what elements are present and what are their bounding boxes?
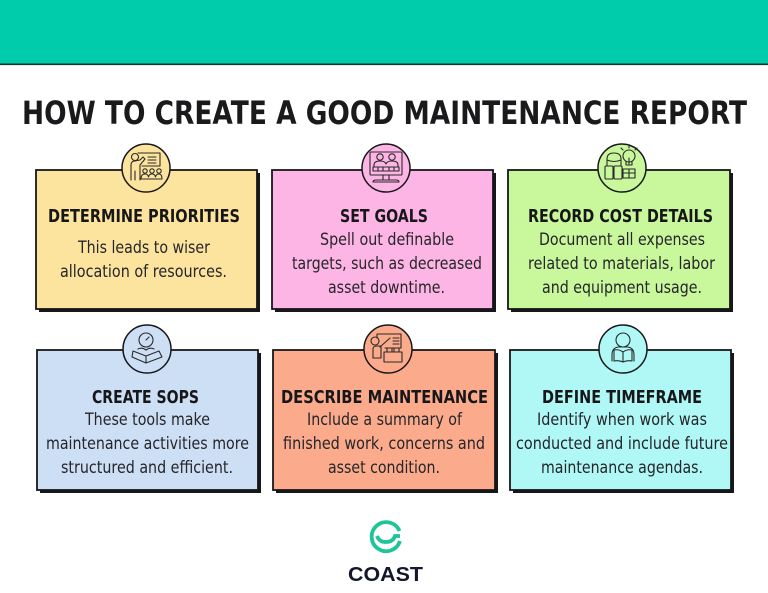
heading: RECORD COST DETAILS: [528, 206, 713, 227]
panel: record cost details: [508, 144, 733, 312]
body text: allocation of resources.: [60, 262, 227, 282]
body text: Identify when work was: [537, 410, 707, 430]
icon: video call monitor: [362, 144, 410, 192]
body text: [46, 410, 249, 478]
header band: [0, 0, 768, 65]
body text: Include a summary of: [307, 410, 463, 430]
icon: person reading: [599, 325, 647, 373]
body text: targets, such as decreased: [292, 254, 482, 274]
icon: supplies and light bulb: [598, 144, 646, 192]
panel: determine priorities: [36, 144, 260, 312]
body text: asset condition.: [328, 458, 440, 478]
panel: define timeframe: [510, 325, 734, 493]
body text: structured and efficient.: [61, 458, 233, 478]
icon: reader with open book: [123, 325, 171, 373]
heading: DEFINE TIMEFRAME: [542, 387, 702, 408]
body text: and equipment usage.: [542, 278, 702, 298]
body text: [292, 230, 482, 298]
icon: presenter with audience: [122, 144, 170, 192]
panel: create sops: [37, 325, 261, 493]
wordmark: COAST: [348, 564, 423, 586]
heading: SET GOALS: [340, 206, 428, 227]
body text: This leads to wiser: [77, 238, 210, 258]
heading: DETERMINE PRIORITIES: [48, 206, 240, 227]
icon: smiling ring: [372, 522, 400, 551]
body text: asset downtime.: [328, 278, 445, 298]
body text: maintenance agendas.: [541, 458, 703, 478]
panel: describe maintenance: [273, 325, 498, 493]
body text: [60, 238, 227, 282]
body text: finished work, concerns and: [283, 434, 485, 454]
body text: [528, 230, 715, 298]
body text: maintenance activities more: [46, 434, 249, 454]
heading: CREATE SOPS: [92, 387, 199, 408]
body text: Document all expenses: [539, 230, 705, 250]
body text: [516, 410, 728, 478]
logo: coast: [348, 522, 423, 586]
body text: Spell out definable: [320, 230, 454, 250]
body text: [283, 410, 485, 478]
heading: DESCRIBE MAINTENANCE: [281, 387, 488, 408]
body text: These tools make: [84, 410, 210, 430]
body text: conducted and include future: [516, 434, 728, 454]
body text: related to materials, labor: [528, 254, 715, 274]
icon: presenter at board: [364, 325, 412, 373]
panel: set goals: [272, 144, 496, 312]
